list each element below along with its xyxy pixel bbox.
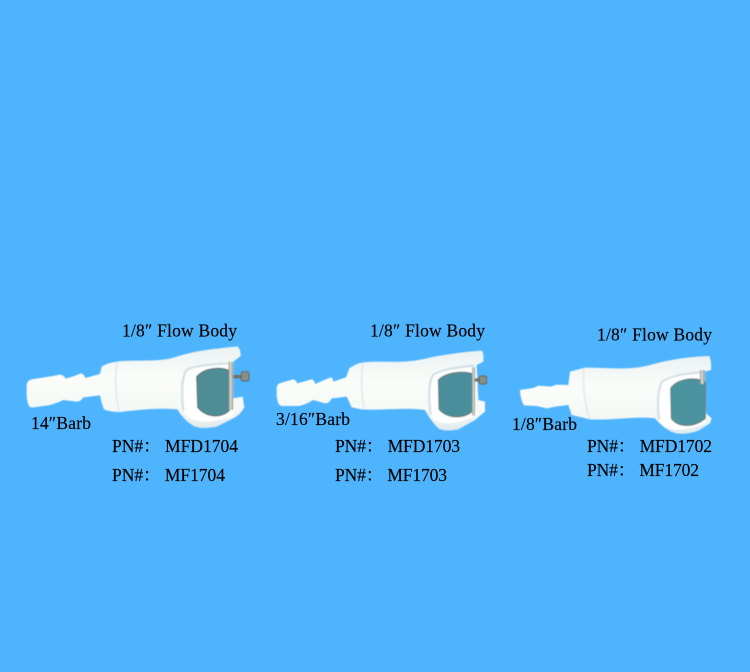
label: part number MF1702: PN#： MF1702 [587,460,699,480]
label: flow body: 1/8″ Flow Body [597,324,712,344]
connector: 1/8 barb [520,356,712,434]
label: flow body: 1/8″ Flow Body [122,320,237,340]
label: part number MFD1703: PN#： MFD1703 [335,436,460,456]
labels: 1/4 barb connector [31,320,238,485]
label: barb size: 1/8″Barb [512,414,577,434]
label: part number MF1704: PN#： MF1704 [112,465,225,485]
label: part number MFD1704: PN#： MFD1704 [112,436,238,456]
labels: 1/8 barb connector [512,324,712,480]
connector: 1/4 barb [27,346,249,428]
label: barb size: 3/16″Barb [276,409,350,429]
label: part number MFD1702: PN#： MFD1702 [587,436,712,456]
labels: 3/16 barb connector [276,320,485,485]
connector: 3/16 barb [277,351,487,430]
label: barb size: 14″Barb [31,413,91,433]
label: part number MF1703: PN#： MF1703 [335,465,447,485]
label: flow body: 1/8″ Flow Body [370,320,485,340]
